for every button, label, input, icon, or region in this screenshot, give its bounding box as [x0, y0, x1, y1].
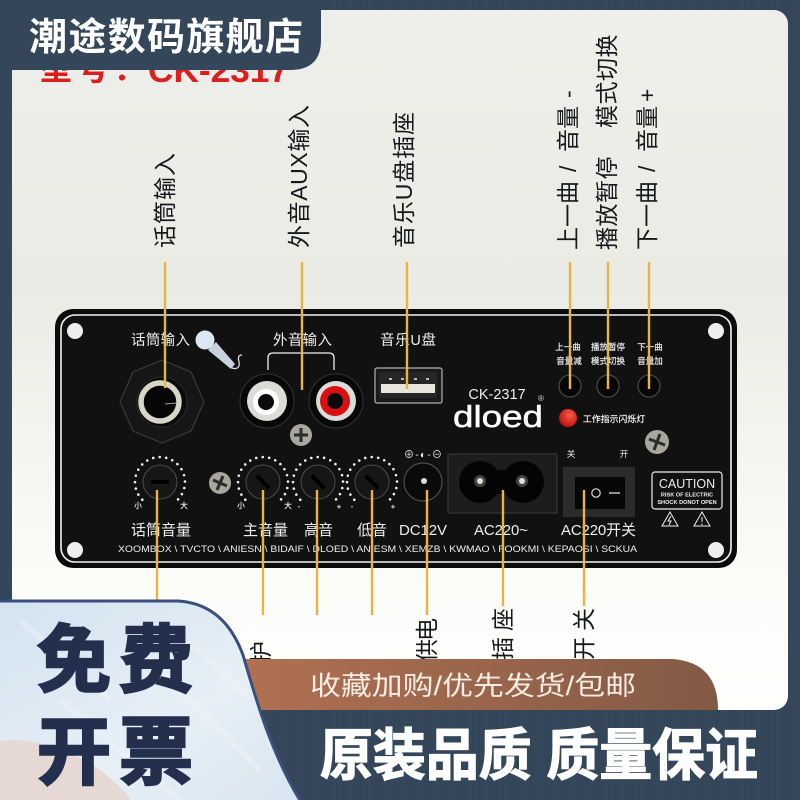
control labels: DC12V	[399, 522, 447, 539]
knob scale marks: +	[391, 502, 396, 511]
bottom vertical labels	[248, 608, 597, 664]
button labels: 音量加	[637, 356, 663, 366]
caution label: SHOCK DONOT OPEN	[657, 500, 717, 506]
amplifier faceplate	[55, 309, 737, 568]
brand line: XOOMBOX \ TVCTO \ ANIESN \ BIDAIF \ DLOED \ ANIESM \ XEMZB \ KWMAO \ FOOKMI \ KEPAOSI \ SCKUA	[118, 544, 638, 555]
label: next / volume up: 音量	[634, 106, 660, 152]
push buttons	[559, 375, 660, 397]
label: next / volume up: 下一曲	[634, 181, 660, 250]
label: AUX input: 外音AUX输入	[286, 105, 312, 248]
switch labels	[567, 448, 629, 459]
red RCA jack	[309, 374, 363, 428]
label: play pause / mode: 模式切换	[594, 34, 620, 128]
warning triangles	[662, 512, 710, 526]
caution label	[652, 472, 722, 509]
button labels: 播放暂停	[591, 342, 625, 352]
free invoice panel	[0, 601, 301, 800]
label: previous / volume down: /	[555, 165, 581, 172]
label: mic input: 话筒输入	[152, 153, 178, 248]
knobs	[135, 457, 397, 500]
switch labels: 开	[620, 449, 629, 459]
knob scale marks: 大	[284, 500, 292, 510]
button labels: 音量减	[556, 356, 582, 366]
DC polarity icon: ⊕-◐-⊖	[404, 450, 442, 461]
switch labels: 关	[567, 448, 576, 459]
quality slogan: 原装品质 质量保证	[320, 724, 758, 787]
promotion banner	[230, 659, 718, 710]
label: previous / volume down: 上一曲	[555, 181, 581, 250]
store name tab	[0, 0, 321, 70]
aux label: 外音输入	[273, 332, 332, 349]
label: previous / volume down: 音量	[555, 106, 581, 152]
knob scale marks: 小	[237, 501, 245, 510]
AC socket	[448, 454, 557, 513]
label: previous / volume down: -	[555, 90, 581, 98]
model heading	[40, 51, 289, 90]
ice texture	[18, 618, 64, 658]
mounting holes	[67, 323, 724, 558]
label: next / volume up: +	[634, 89, 660, 102]
invoice text: 开票	[37, 711, 193, 794]
knob scale marks: -	[298, 502, 301, 511]
control labels: 话筒音量	[131, 522, 191, 539]
banner text: 收藏加购/优先发货/包邮	[310, 671, 636, 701]
button labels	[555, 342, 663, 366]
screws	[209, 424, 669, 494]
label: DC power: 供电	[414, 618, 440, 662]
mic icon	[196, 330, 242, 369]
mic jack	[120, 360, 204, 443]
label: play pause / mode: 播放暂停	[594, 156, 620, 250]
knob scale marks: -	[351, 502, 354, 511]
knob scale marks: 小	[134, 501, 142, 510]
white RCA jack	[240, 374, 294, 428]
control labels: 高音	[304, 522, 333, 539]
control labels: AC220~	[474, 522, 528, 539]
label: AC socket: 插座	[490, 608, 516, 660]
free text: 免费	[37, 619, 193, 702]
aux bracket	[268, 353, 334, 370]
label: next / volume up: /	[634, 165, 660, 172]
label: volume adjust: 护	[248, 641, 274, 664]
model heading: 型号：	[40, 51, 151, 87]
knob scale marks: +	[337, 502, 342, 511]
model heading: CK-2317	[148, 52, 289, 90]
registered mark: ®	[538, 394, 544, 403]
button labels: 上一曲	[555, 342, 581, 352]
callout lines	[157, 262, 649, 615]
mic label: 话筒输入	[131, 332, 190, 349]
rocker switch	[563, 467, 635, 517]
soft background shape	[0, 740, 131, 800]
LED label: 工作指示闪烁灯	[583, 413, 645, 424]
control labels: 主音量	[243, 522, 288, 539]
knob scale marks	[134, 500, 396, 511]
button labels: 模式切换	[591, 356, 625, 366]
indicator LED	[559, 409, 577, 427]
DC jack	[404, 463, 442, 501]
model number: CK-2317	[468, 387, 526, 403]
store name: 潮途数码旗舰店	[29, 17, 303, 59]
label: power switch: 开关	[571, 608, 597, 660]
USB label: 音乐U盘	[380, 331, 436, 349]
control labels	[131, 522, 636, 539]
knob scale marks: 大	[180, 500, 188, 510]
caution label: RISK OF ELECTRIC	[661, 492, 713, 498]
control labels: AC220开关	[561, 522, 636, 539]
dloed logo: dloed	[453, 399, 543, 434]
caution label: CAUTION	[659, 477, 715, 491]
button labels: 下一曲	[637, 342, 663, 352]
control labels: 低音	[357, 522, 387, 539]
label: USB socket: 音乐U盘插座	[391, 112, 417, 248]
top vertical labels	[152, 34, 660, 250]
USB socket	[375, 368, 442, 403]
callout lines over faceplate	[157, 309, 649, 568]
